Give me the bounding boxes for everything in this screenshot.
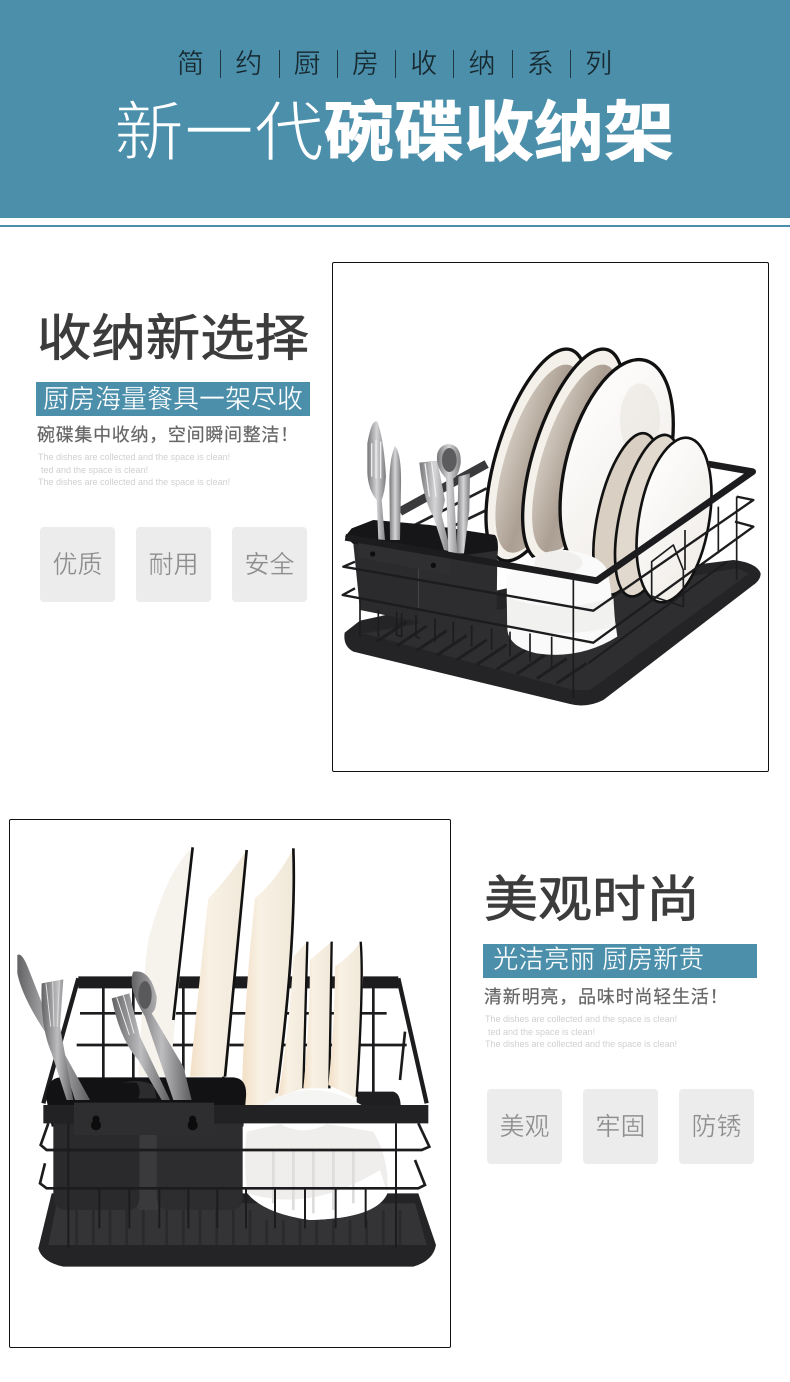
feature tile: quality: 优质 [52, 551, 102, 579]
feature tile: safe: 安全 [244, 551, 294, 579]
header banner [0, 0, 790, 218]
feature tile: rustproof: 防锈 [691, 1113, 742, 1141]
banner: storage tagline: 厨房海量餐具一架尽收 [43, 384, 303, 414]
bowl [507, 549, 617, 655]
tray [344, 560, 761, 705]
feature tile: sturdy [583, 1089, 658, 1164]
section heading: storage: 收纳新选择 [37, 310, 309, 367]
storage english text: The dishes are collected and the space is clean! [38, 452, 230, 462]
front wire basket [343, 464, 753, 698]
style english text: The dishes are collected and the space is clean! [485, 1014, 677, 1024]
feature tile: beautiful: 美观 [499, 1113, 550, 1141]
feature tile: beautiful [487, 1089, 562, 1164]
feature tile: sturdy: 牢固 [595, 1113, 646, 1141]
feature tile: rustproof [679, 1089, 754, 1164]
style subline: 清新明亮，品味时尚轻生活！ [484, 987, 728, 1007]
bowl [245, 1090, 388, 1220]
right back cup [357, 1092, 401, 1105]
front wires [40, 1123, 429, 1248]
illustration: dish rack angled view [342, 347, 761, 706]
small plates [580, 427, 723, 608]
cutlery [367, 421, 470, 553]
style english text: ted and the space is clean! [488, 1027, 595, 1037]
holder opening [46, 1077, 246, 1127]
storage english text: ted and the space is clean! [41, 465, 148, 475]
back rail [405, 488, 487, 547]
feature tile: durable [136, 527, 211, 602]
illustration: dish rack front view [17, 847, 436, 1267]
style english text [485, 1014, 677, 1049]
section heading: style: 美观时尚 [484, 872, 700, 928]
utensil holder [353, 539, 497, 635]
utensil holder [43, 1103, 428, 1210]
header underline [0, 225, 790, 227]
photo frame: angled rack [332, 262, 769, 772]
banner: style tagline: 光洁亮丽 厨房新贵 [493, 946, 704, 974]
series subtitle: 简约厨房收纳系列 [177, 49, 643, 79]
cutlery [17, 954, 192, 1100]
style english text: The dishes are collected and the space is clean! [485, 1039, 677, 1049]
large plates [465, 338, 694, 586]
storage english text: The dishes are collected and the space is clean! [38, 477, 230, 487]
feature tile: quality [40, 527, 115, 602]
photo frame: front rack [9, 819, 451, 1348]
feature tile: safe [232, 527, 307, 602]
tray [38, 1193, 436, 1267]
main title: 新一代碗碟收纳架 [114, 96, 674, 169]
plates [138, 847, 363, 1105]
storage english text [38, 452, 230, 487]
storage subline: 碗碟集中收纳，空间瞬间整洁！ [37, 425, 299, 445]
banner: style tagline [483, 944, 757, 978]
back wires [43, 978, 427, 1103]
holder opening [345, 520, 498, 560]
feature tile: durable: 耐用 [148, 551, 198, 579]
